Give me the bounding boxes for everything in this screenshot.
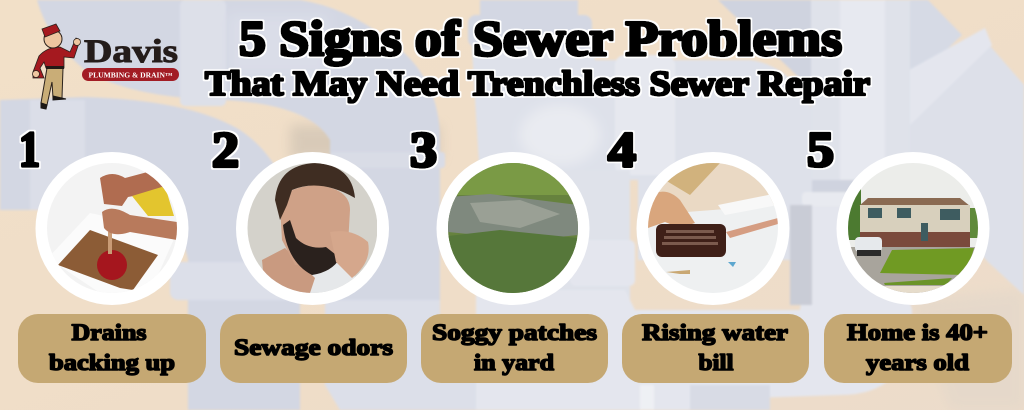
top middle diagonal <box>718 0 905 200</box>
number 2: 2 <box>212 121 239 177</box>
heading line 1: 5 Signs of Sewer Problems <box>239 10 842 66</box>
left elbow <box>0 97 300 410</box>
label: sewage odors: Sewage odors <box>234 335 393 361</box>
label: soggy patches in yard: in yard <box>474 350 554 376</box>
right vertical pipe <box>811 0 910 180</box>
label: rising water bill <box>622 314 809 383</box>
number 5: 5 <box>807 121 834 177</box>
label: home is 40+ years old <box>824 314 1012 383</box>
label: drains backing up: Drains <box>72 320 146 346</box>
badge: Plumbing & Drain <box>82 68 179 81</box>
panel: sewage odors photo <box>236 152 389 305</box>
label: home is 40+ years old: years old <box>866 350 969 376</box>
lower T vertical <box>480 170 630 310</box>
number 1: 1 <box>19 121 40 177</box>
wordmark: Davis: Davis <box>84 34 178 70</box>
label: rising water bill: bill <box>698 350 734 376</box>
label: home is 40+ years old: Home is 40+ <box>847 320 988 346</box>
label: rising water bill: Rising water <box>642 320 788 346</box>
bottom elbow <box>476 205 912 410</box>
number 4: 4 <box>608 121 636 177</box>
panel: drains backing up photo <box>36 152 188 305</box>
logo: Davis Plumbing & Drain <box>32 24 179 109</box>
T junction pipe <box>470 18 812 260</box>
icon: plumber mascot <box>32 24 80 109</box>
top elbow <box>37 0 440 300</box>
badge: Plumbing & Drain: PLUMBING & DRAIN™ <box>88 72 172 80</box>
label: sewage odors <box>220 314 407 383</box>
label: soggy patches in yard: Soggy patches <box>432 320 597 346</box>
centre bottom pipe <box>325 300 490 410</box>
label: drains backing up: backing up <box>49 350 175 376</box>
title <box>205 10 870 103</box>
upper right diagonal <box>905 0 962 90</box>
label: soggy patches in yard <box>421 314 608 383</box>
panel: soggy patches photo <box>436 152 590 305</box>
panel: rising water bill photo <box>636 152 790 305</box>
panel: older home photo <box>836 152 990 305</box>
heading line 2: That May Need Trenchless Sewer Repair <box>205 65 870 103</box>
number 3: 3 <box>410 121 437 177</box>
label: drains backing up <box>18 314 206 383</box>
